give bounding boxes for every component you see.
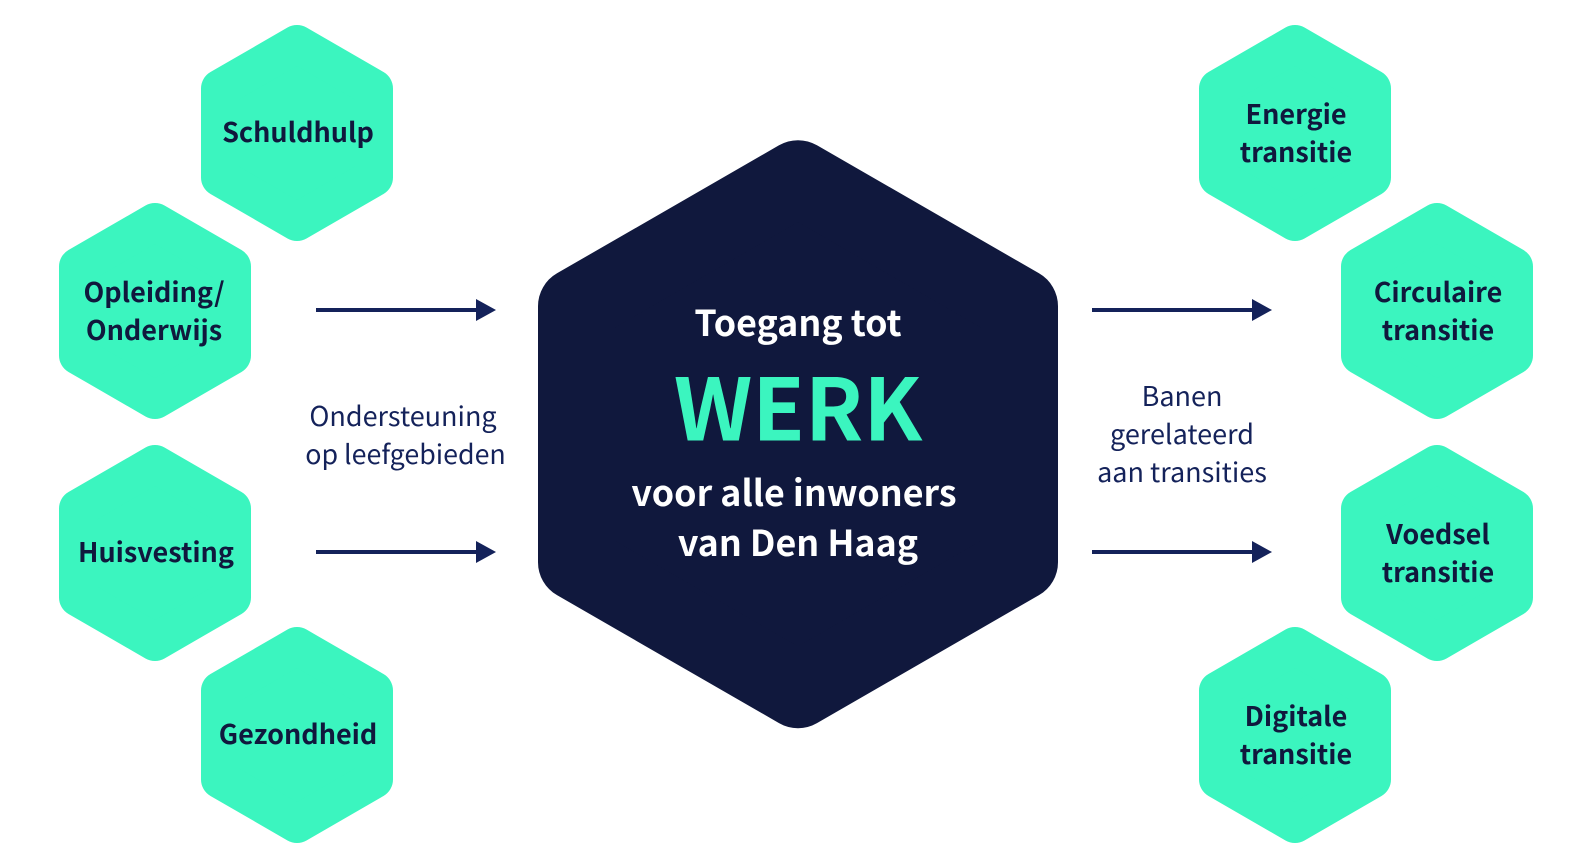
hexagon: Gezondheid (219, 646, 377, 824)
hexagon: Circulaire transitie: transitie (1382, 309, 1494, 348)
arrow: top right (1092, 299, 1272, 321)
hexagon: Voedsel transitie: transitie (1382, 551, 1494, 590)
arrow: top left (316, 299, 496, 321)
hexagon: Energie transitie: Energie (1245, 93, 1347, 132)
hexagon: Digitale transitie: Digitale (1245, 695, 1347, 734)
label: Ondersteuning op leefgebieden: op leefgebieden (305, 433, 506, 472)
label: Banen gerelateerd aan transities: Banen (1142, 375, 1222, 414)
hexagon: Digitale transitie (1218, 646, 1372, 824)
heading: Toegang tot: Toegang tot (694, 295, 902, 347)
hexagon: Voedsel transitie: Voedsel (1385, 513, 1490, 552)
hexagon: Gezondheid: Gezondheid (219, 713, 377, 752)
hexagon: Opleiding/Onderwijs: Opleiding/ (83, 271, 225, 310)
central hexagon (576, 178, 1020, 690)
hexagon: Circulaire transitie (1360, 222, 1514, 400)
hexagon: Circulaire transitie: Circulaire (1374, 271, 1502, 310)
hexagon: Digitale transitie: transitie (1240, 733, 1352, 772)
hexagon: Opleiding/Onderwijs: Onderwijs (86, 309, 222, 348)
hexagon: Energie transitie: transitie (1240, 131, 1352, 170)
hexagon: Schuldhulp: Schuldhulp (222, 111, 374, 150)
label: Ondersteuning op leefgebieden (305, 395, 506, 472)
subheading: voor alle inwoners van Den Haag: voor alle inwoners (631, 465, 957, 517)
hexagon: Huisvesting: Huisvesting (78, 531, 234, 570)
hexagon: Schuldhulp (220, 44, 374, 222)
subheading: voor alle inwoners van Den Haag: van Den Haag (678, 515, 918, 567)
label: Banen gerelateerd aan transities: aan transities (1097, 451, 1267, 490)
subheading: voor alle inwoners van Den Haag (631, 465, 957, 567)
label: Ondersteuning op leefgebieden: Ondersteuning (309, 395, 497, 434)
arrow: bottom right (1092, 541, 1272, 563)
hexagon: Opleiding/Onderwijs (78, 222, 232, 400)
label: Banen gerelateerd aan transities (1097, 375, 1267, 490)
hexagon: Huisvesting (78, 464, 234, 642)
hexagon: Energie transitie (1218, 44, 1372, 222)
label: Banen gerelateerd aan transities: gerelateerd (1110, 413, 1254, 452)
arrow: bottom left (316, 541, 496, 563)
heading: WERK: WERK (674, 342, 923, 466)
hexagon: Voedsel transitie (1360, 464, 1514, 642)
